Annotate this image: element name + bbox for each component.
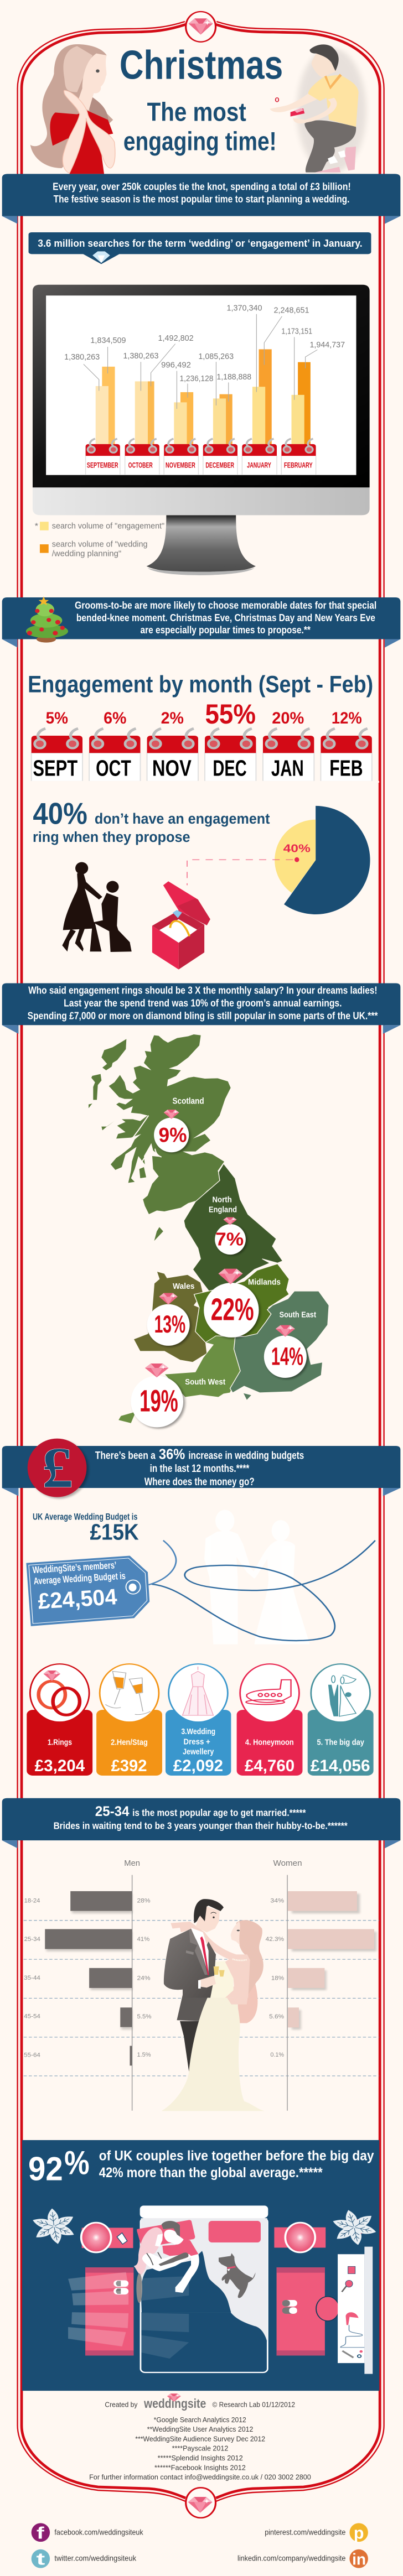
bar chart: age of marriage: 5.6% (269, 2013, 284, 2020)
map: Scotland (89, 1034, 231, 1214)
bar chart: monthly search volume: 1,834,509 (90, 336, 126, 345)
icon: pound coin: £ (42, 1435, 73, 1500)
text: UK average budget: UK Average Wedding Budget is (33, 1512, 137, 1522)
month calendars: NOVEMBER (166, 461, 195, 470)
card: rings: £3,204 (35, 1757, 85, 1775)
card: the big day (308, 1664, 374, 1776)
percentages by month: 2% (161, 708, 184, 727)
month calendars: JANUARY (247, 461, 271, 470)
banner: ring spend (2, 983, 400, 1034)
banner: most popular age (2, 1798, 400, 1848)
social: twitter: t (36, 2550, 45, 2568)
card: the big day: £14,056 (311, 1757, 370, 1775)
bar chart: age of marriage: 5.5% (137, 2013, 151, 2020)
map pin: Wales 13% (147, 1293, 191, 1347)
percentages by month (46, 699, 362, 730)
map pin: South East 14%: 14% (271, 1343, 303, 1370)
title: The most (147, 97, 246, 127)
banner: wedding budgets: 36% (159, 1446, 185, 1463)
month calendars: SEPTEMBER (87, 461, 118, 470)
blanket (141, 2251, 231, 2312)
section: monitor chart (2, 285, 400, 648)
map: Wales (133, 1271, 207, 1362)
bedside table left with lamp (81, 2223, 133, 2252)
bar chart: age of marriage: 28% (137, 1897, 151, 1904)
bed frame and sheet (141, 2218, 267, 2372)
social: linkedin: in (352, 2550, 366, 2568)
chart legend: search volume of "wedding (52, 540, 148, 549)
bar chart: monthly search volume: 1,492,802 (158, 334, 194, 343)
bar chart: monthly search volume: 1,188,888 (216, 372, 251, 382)
callout: search volume (29, 232, 371, 264)
pie chart: 40% (187, 806, 370, 914)
map pin: Scotland 9% (154, 1110, 190, 1153)
banner: wedding budgets: There’s been a (95, 1450, 156, 1461)
woman (134, 2228, 192, 2303)
price tag: member budget: £24,504 (37, 1584, 118, 1614)
monitor (33, 285, 370, 575)
icon: pound coin (28, 1435, 89, 1500)
map label: South East: South East (280, 1310, 316, 1319)
map label: North England (209, 1195, 237, 1214)
map: South West (118, 1336, 240, 1423)
section: budget breakdown and age chart (2, 1664, 400, 1868)
card: honeymoon: 4. Honeymoon (245, 1737, 294, 1747)
map label: North England: England (209, 1205, 237, 1214)
text: UK average budget (33, 1512, 139, 1545)
bar chart: age of marriage: 35-44 (24, 1974, 40, 1981)
dog (219, 2253, 256, 2298)
bar chart: age of marriage: 24% (137, 1975, 151, 1981)
section: age chart and lower couple (22, 1875, 379, 2391)
illustration: open ring box (152, 881, 210, 970)
map pin: Wales 13%: 13% (154, 1311, 185, 1338)
map: South East (230, 1291, 329, 1401)
map labels: Wales and Midlands: Midlands (248, 1278, 281, 1287)
bar chart: monthly search volume: 1,944,737 (309, 340, 345, 350)
percentages by month: 20% (272, 708, 304, 727)
bar chart: age of marriage: 45-54 (24, 2013, 40, 2020)
map pin: North England 7%: 7% (215, 1229, 244, 1250)
card: the big day: 5. The big day (317, 1737, 364, 1747)
source notes: **WeddingSite User Analytics 2012 (147, 2426, 253, 2434)
map pin: South East 14% (264, 1325, 308, 1379)
social: linkedin: linkedin.com/company/weddingsite (237, 2554, 346, 2563)
icon: christmas tree (26, 596, 68, 643)
poinsettia left (31, 2208, 76, 2245)
card: wedding dress and jewellery: Dress + (184, 1737, 210, 1746)
poinsettia right (331, 2209, 378, 2246)
source notes: ****Payscale 2012 (172, 2444, 228, 2453)
bar chart: monthly search volume: 1,380,263 (64, 352, 100, 362)
map: Midlands (194, 1264, 289, 1342)
month calendars: OCTOBER (128, 461, 153, 470)
bar chart: age of marriage: 18% (271, 1975, 284, 1981)
percentages by month: 55% (205, 699, 256, 730)
map pin: North England 7% (215, 1217, 247, 1256)
banner: most popular age: 25-34 (95, 1804, 130, 1819)
credit line: Created by (105, 2401, 138, 2409)
source notes (89, 2416, 311, 2481)
card: hen and stag: £392 (111, 1757, 147, 1775)
month calendars: FEBRUARY (284, 461, 313, 470)
month calendar cards: NOV (152, 755, 192, 781)
social: facebook: facebook.com/weddingsiteuk (54, 2528, 143, 2537)
chart column headings (124, 1858, 302, 1868)
bedside table right with lamp (274, 2223, 326, 2252)
map pin: South West 19%: 19% (140, 1383, 178, 1418)
month calendar cards: SEPT (33, 755, 78, 781)
map: Isle of Man (154, 1227, 163, 1241)
bed headboard (140, 2205, 268, 2218)
banner: wedding budgets: increase in wedding budgets (188, 1450, 304, 1461)
banner: most popular age: is the most popular age to get married.***** (132, 1808, 306, 1819)
map pin: Midlands 22%: 22% (211, 1292, 254, 1327)
bar chart: age of marriage (24, 1891, 376, 2065)
bar chart: monthly search volume: 1,370,340 (227, 304, 262, 313)
pie chart: 40%: 40% (283, 842, 311, 855)
card: wedding dress and jewellery: £2,092 (173, 1757, 223, 1775)
banner: proposal dates (2, 596, 400, 648)
bar chart: age of marriage: 42.3% (266, 1935, 284, 1943)
card: hen and stag (96, 1664, 162, 1776)
social: linkedin (237, 2549, 368, 2568)
ribbon (148, 1541, 375, 1641)
text: 40% no ring: ring when they propose (33, 829, 190, 846)
bar chart: age of marriage: 0.1% (270, 2052, 284, 2058)
social: pinterest (265, 2523, 368, 2542)
illustration: wedding couple upper half (164, 1899, 264, 1998)
source notes: For further information contact info@weddingsite.co.uk / 020 3002 2800 (89, 2473, 311, 2481)
bar chart: monthly search volume: 1,236,128 (180, 374, 213, 383)
panel: living together: % (64, 2144, 90, 2182)
map pin: South West 19% (131, 1364, 185, 1429)
chart column headings: Men (124, 1858, 140, 1868)
rug left (85, 2267, 133, 2355)
source notes: ******Facebook Insights 2012 (154, 2464, 246, 2472)
illustration: proposal silhouette (62, 862, 132, 952)
card: rings: 1.Rings (48, 1737, 72, 1747)
chart column headings: Women (273, 1858, 302, 1868)
text: 40% no ring: 40% (33, 797, 87, 831)
percentages by month: 5% (46, 708, 68, 727)
rug right (277, 2267, 325, 2355)
month calendar cards: OCT (96, 755, 131, 781)
bar chart: age of marriage: 34% (270, 1897, 284, 1904)
map label: South West: South West (185, 1377, 226, 1387)
section: header (2, 12, 400, 264)
title (120, 43, 283, 156)
banner: wedding budgets: Where does the money go? (144, 1476, 255, 1487)
bar chart: age of marriage: 41% (137, 1935, 149, 1943)
banner: wedding budgets (2, 1435, 400, 1500)
card: rings (27, 1664, 92, 1776)
month calendars (86, 439, 316, 475)
card: hen and stag: 2.Hen/Stag (111, 1737, 148, 1747)
price tag: member budget: WeddingSite’s members’ (32, 1560, 117, 1576)
card: wedding dress and jewellery (166, 1664, 231, 1776)
card: honeymoon: £4,760 (245, 1757, 294, 1775)
illustration: woman (30, 44, 115, 174)
bar chart: monthly search volume: 996,492 (161, 360, 191, 370)
illustration: bride and groom silhouette (204, 1510, 309, 1645)
social: twitter (32, 2549, 136, 2568)
map labels: Wales and Midlands (173, 1278, 281, 1291)
bar chart: monthly search volume: 1,085,263 (198, 352, 234, 361)
month calendars: DECEMBER (205, 461, 234, 470)
price tag: member budget: Average Wedding Budget is (33, 1571, 126, 1587)
map label: North England: North (213, 1195, 232, 1204)
credit line: © Research Lab 01/12/2012 (213, 2401, 295, 2409)
illustration: man proposing (270, 44, 366, 173)
panel: living together: 92 (28, 2150, 63, 2187)
chart legend (35, 522, 164, 558)
percentages by month: 6% (104, 708, 126, 727)
credit line: weddingsite (143, 2396, 206, 2411)
bar chart: monthly search volume: 1,380,263 (123, 351, 158, 361)
social: pinterest: p (354, 2524, 364, 2542)
percentages by month: 12% (332, 708, 362, 727)
card: honeymoon (237, 1664, 302, 1776)
map label: Scotland: Scotland (173, 1096, 204, 1106)
credit line (105, 2393, 295, 2411)
month calendar cards: FEB (329, 755, 363, 781)
text: 40% no ring (33, 797, 270, 846)
social: facebook (32, 2523, 143, 2542)
card: wedding dress and jewellery: 3.Wedding (181, 1726, 215, 1736)
banner: couples statistic (2, 174, 400, 224)
illustration: bedroom couple and dog (134, 2205, 268, 2312)
pillows (137, 2220, 261, 2247)
banner: wedding budgets: in the last 12 months.**** (150, 1463, 250, 1475)
section: UK map north (154, 1096, 283, 1297)
chart legend: * (35, 522, 38, 530)
bar chart: age of marriage: 1.5% (137, 2052, 151, 2058)
price tag: member budget (26, 1556, 149, 1626)
map labels: Wales and Midlands: Wales (173, 1282, 194, 1291)
man (159, 2221, 199, 2293)
source notes: *****Splendid Insights 2012 (158, 2454, 243, 2463)
section: engagement by month (23, 671, 379, 970)
source notes: ***WeddingSite Audience Survey Dec 2012 (135, 2435, 265, 2443)
top diamond medallion (186, 12, 216, 42)
illustration: bedroom furniture (31, 2208, 378, 2372)
social: pinterest: pinterest.com/weddingsite (265, 2528, 346, 2537)
panel: living together (22, 2140, 379, 2391)
section: bedroom illustration and footer (31, 2208, 378, 2568)
map pin: Scotland 9%: 9% (158, 1123, 187, 1147)
illustration: wedding couple lower half (162, 1967, 265, 2111)
bottom diamond medallion (186, 2487, 216, 2518)
bar chart: age of marriage: 18-24 (24, 1897, 40, 1904)
banner: proposal dates: are especially popular times to propose.** (141, 625, 311, 636)
slippers (113, 2280, 297, 2314)
dresser and stool (316, 2247, 373, 2374)
bar chart: age of marriage: 25-34 (24, 1935, 40, 1943)
month calendar cards (23, 728, 379, 783)
month calendar cards: JAN (271, 755, 304, 781)
chart legend: search volume of "engagement" (52, 522, 164, 530)
chart legend: /wedding planning" (52, 550, 121, 558)
bar chart: age of marriage: 55-64 (24, 2052, 40, 2058)
text: 40% no ring: don’t have an engagement (95, 810, 270, 827)
map pin: Midlands 22% (204, 1269, 260, 1339)
month calendar cards: DEC (213, 755, 247, 781)
bar chart: monthly search volume (64, 304, 345, 445)
bar chart: monthly search volume: 1,173,151 (281, 326, 312, 336)
section: UK map south (2, 1264, 400, 1645)
social: facebook: f (37, 2524, 45, 2542)
text: UK average budget: £15K (90, 1519, 139, 1545)
card: wedding dress and jewellery: Jewellery (183, 1747, 214, 1756)
source notes: *Google Search Analytics 2012 (154, 2416, 246, 2424)
social: twitter: twitter.com/weddingsiteuk (54, 2554, 136, 2563)
bar chart: monthly search volume: 2,248,651 (273, 306, 309, 315)
window light on floor and bed (68, 2272, 189, 2359)
map: North England (184, 1164, 283, 1297)
chart grid lines and axes (24, 1875, 379, 2111)
title: engaging time! (123, 127, 277, 156)
title: Christmas (120, 43, 283, 87)
